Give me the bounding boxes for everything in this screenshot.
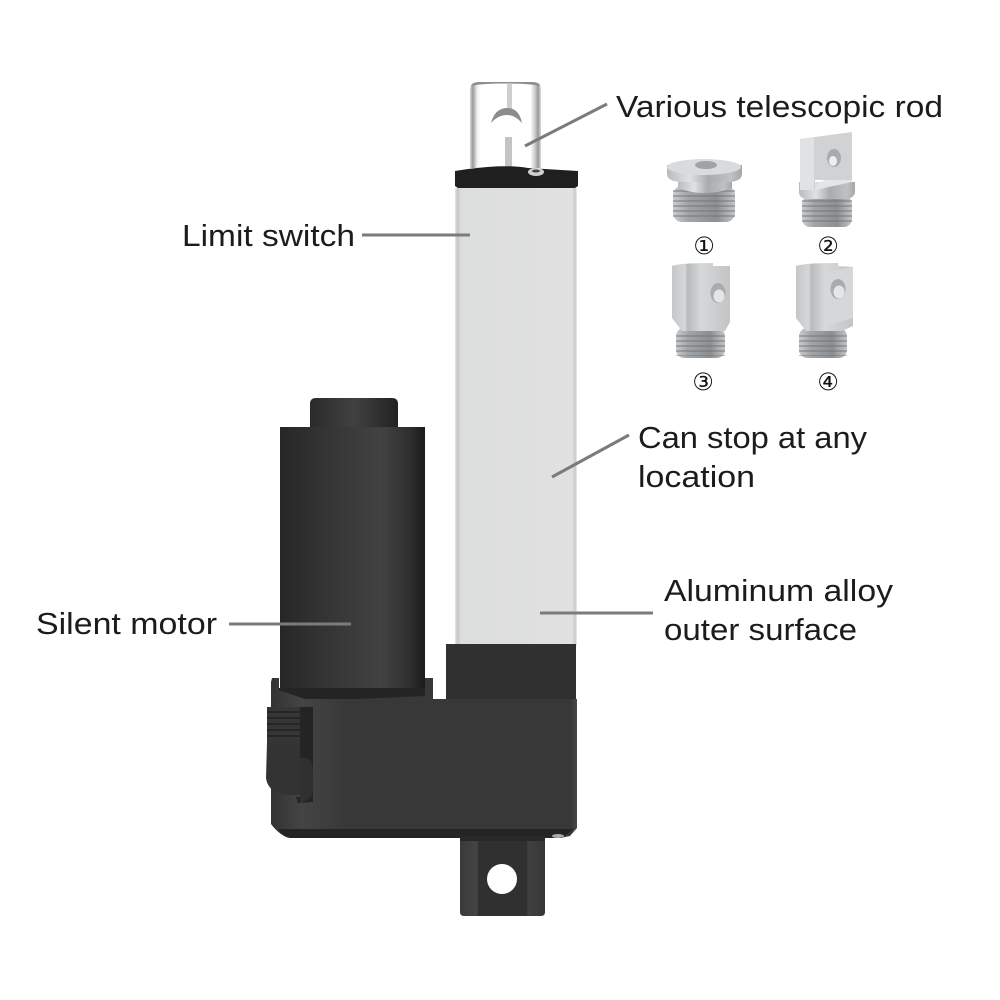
number 4: ④ (817, 368, 839, 396)
telescopic rod (470, 82, 541, 168)
rod end option 2 (799, 132, 855, 260)
label: Various telescopic rod: Various telescopic rod (616, 89, 943, 124)
number 2: ② (817, 232, 839, 260)
number 1: ① (693, 232, 715, 260)
aluminum outer tube (455, 188, 577, 646)
gearbox base (271, 678, 577, 838)
top black collar (455, 166, 578, 188)
label: Aluminum alloy outer surface: Aluminum alloy (664, 573, 894, 608)
rod end option 3 (672, 263, 730, 396)
bottom mounting tab (460, 834, 564, 916)
label: Can stop at any location (552, 420, 868, 494)
rod end option 4 (796, 263, 853, 396)
label: Aluminum alloy outer surface (540, 573, 894, 647)
label: Can stop at any location: location (638, 459, 755, 494)
label: Silent motor: Silent motor (36, 606, 217, 641)
label: Aluminum alloy outer surface: outer surface (664, 612, 857, 647)
label: Limit switch: Limit switch (182, 218, 355, 253)
cable connector (266, 707, 313, 803)
lower black collar (446, 644, 576, 702)
label: Can stop at any location: Can stop at any (638, 420, 868, 455)
motor cylinder (280, 398, 425, 689)
number 3: ③ (692, 368, 714, 396)
label: Various telescopic rod (525, 89, 943, 146)
rod end option 1 (667, 159, 742, 260)
